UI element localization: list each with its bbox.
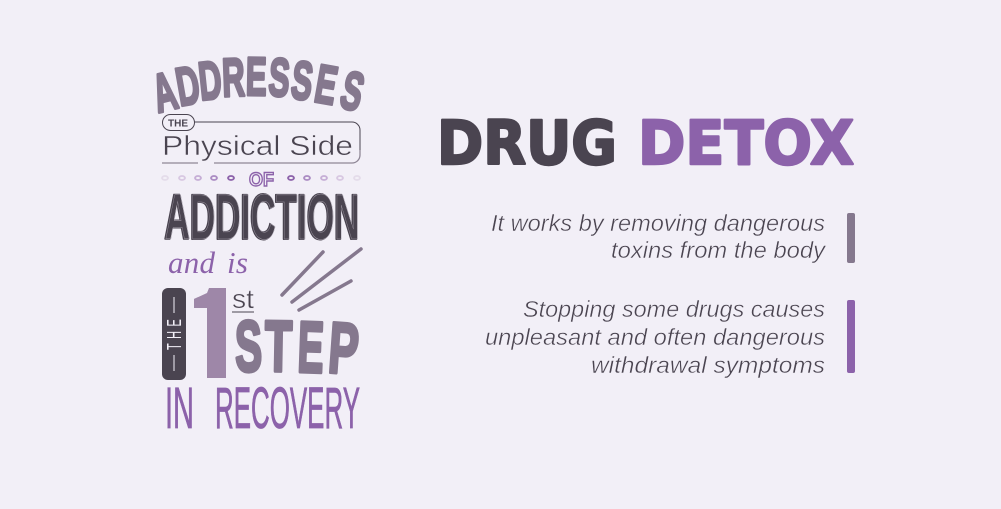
- numeral: 1: [194, 288, 226, 378]
- heading: ADDRESSES: S: [267, 48, 292, 109]
- text block: toxins: [491, 210, 827, 263]
- text block: withdrawal: unpleasant and often dangerous: [485, 324, 826, 350]
- pill: THE: THE: [164, 315, 186, 350]
- text: and is: and: [168, 245, 216, 280]
- title: DRUG DETOX: DRUG: [437, 108, 617, 179]
- heading: STEP: P: [326, 307, 361, 390]
- heading: ADDICTION: [164, 181, 360, 253]
- title: DRUG DETOX: [437, 108, 854, 179]
- infographic canvas: [156, 56, 855, 429]
- heading: ADDICTION: ADDICTION: [165, 181, 360, 253]
- heading: STEP: [234, 306, 361, 390]
- panel: typographic lockup: [156, 56, 364, 429]
- text: and is: [168, 245, 248, 280]
- text: st: st: [232, 284, 255, 314]
- text block: withdrawal: [485, 296, 826, 378]
- heading: STEP: S: [234, 307, 263, 387]
- text: Physical Side: Physical Side: [162, 130, 353, 161]
- label: THE: THE: [168, 118, 188, 130]
- text block: withdrawal: withdrawal symptoms: [591, 352, 826, 378]
- dotted divider with OF: OF: [249, 170, 274, 191]
- infographic canvas: RECOVERY: [215, 376, 360, 441]
- text: and is: is: [227, 245, 248, 280]
- heading: ADDRESSES: [146, 47, 370, 125]
- heading: ADDRESSES: S: [335, 60, 370, 123]
- accent bar: purple: [847, 300, 855, 373]
- text block: toxins: toxins from the body: [611, 237, 827, 263]
- text: IN RECOVERY: IN: [165, 376, 194, 441]
- numeral: 1: 1: [143, 254, 226, 422]
- text block: withdrawal: Stopping some drugs causes: [523, 296, 826, 322]
- heading: ADDRESSES: A: [146, 61, 183, 125]
- pill: THE: [162, 288, 186, 380]
- burst lines: [282, 249, 361, 310]
- heading: ADDRESSES: E: [245, 47, 267, 107]
- title: DRUG DETOX: DETOX: [638, 108, 854, 179]
- heading: ADDRESSES: R: [221, 48, 246, 109]
- heading: STEP: T: [264, 306, 293, 387]
- heading: STEP: E: [296, 308, 325, 389]
- heading: ADDRESSES: D: [196, 50, 225, 112]
- frame: physical side: [162, 114, 360, 163]
- text: IN RECOVERY: [165, 376, 360, 441]
- heading: ADDRESSES: S: [288, 50, 316, 112]
- accent bar: grey: [847, 213, 855, 263]
- heading: ADDRESSES: D: [172, 55, 204, 118]
- heading: ADDICTION: ADDICTION: [164, 181, 359, 253]
- heading: ADDRESSES: E: [311, 54, 342, 117]
- text block: toxins: It works by removing dangerous: [491, 210, 825, 236]
- dotted divider with OF: [162, 170, 360, 191]
